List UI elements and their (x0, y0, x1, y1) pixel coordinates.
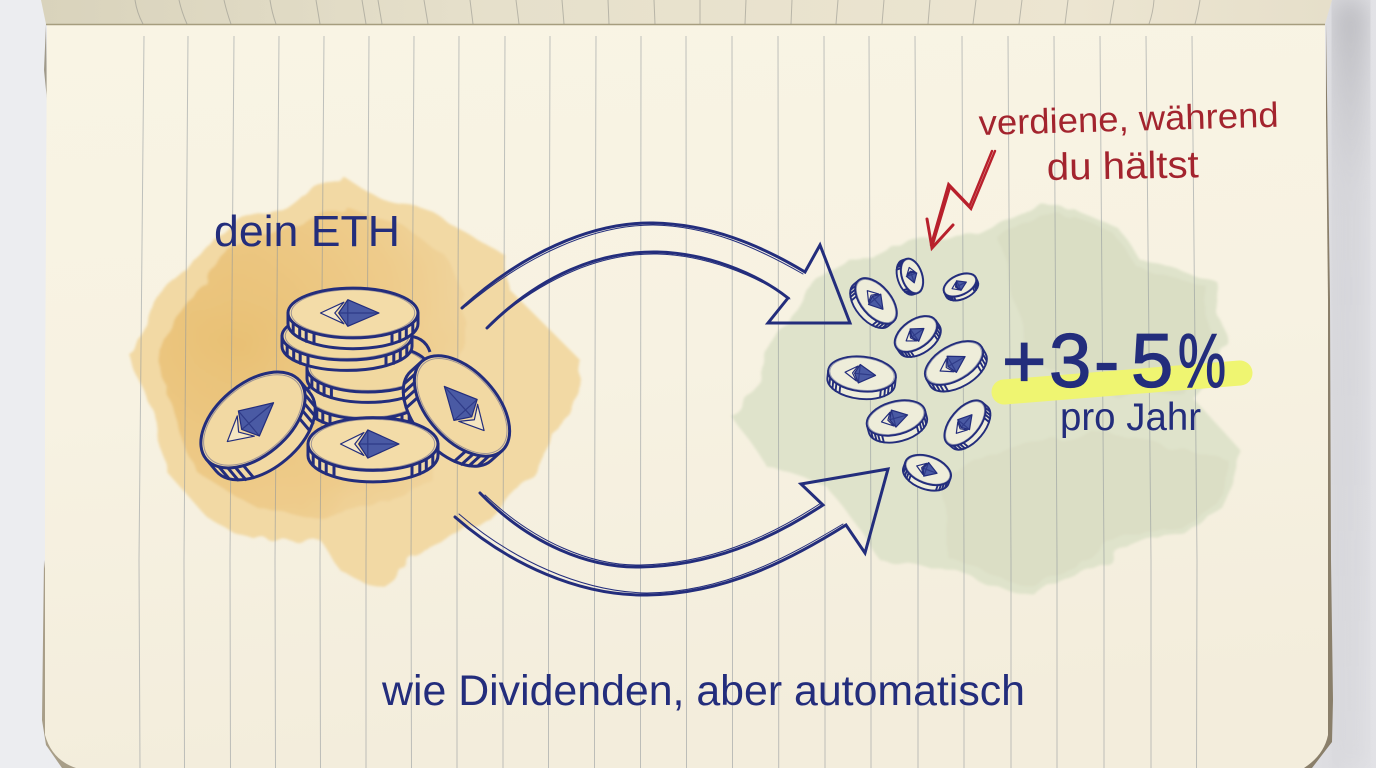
arrow: bottom curved arrow (455, 469, 888, 595)
icon: top coin (288, 288, 418, 349)
folded top page (41, 0, 1332, 24)
icon: coin 3 (940, 269, 982, 305)
red note: verdiene, während du hältst (978, 96, 1279, 189)
icon: coin 1 (842, 271, 905, 336)
coin stack: dein ETH (183, 288, 528, 499)
icon: coin 5 (918, 332, 994, 401)
icon: arc behind right coin (400, 336, 430, 352)
icon: coin 7 (863, 394, 931, 449)
watercolor wash: green (735, 205, 1240, 590)
big figure: +3-5%: % (1178, 319, 1226, 404)
red note: verdiene, während du hältst: du hältst (1046, 144, 1200, 189)
scattered reward coins (826, 256, 998, 496)
icon: front coin (308, 418, 438, 482)
icon: coin third in stack (307, 344, 429, 402)
arrow: red zigzag (927, 151, 995, 248)
big figure: +3-5%: +3-5 (1002, 319, 1173, 404)
icon: left tilted coin (183, 353, 333, 499)
icon: coin second in stack (282, 312, 412, 370)
icon: coin 9 (899, 449, 955, 496)
icon: right tilted coin (385, 338, 528, 484)
arrow: top curved arrow (462, 223, 850, 328)
highlighter stroke (1004, 373, 1240, 392)
watercolor wash: orange (125, 178, 580, 582)
icon: coin fourth in stack (306, 371, 426, 429)
ruled vertical lines (139, 36, 1197, 768)
label: dein ETH: dein ETH (214, 207, 400, 256)
icon: coin 4 (888, 309, 947, 364)
red note: verdiene, während du hältst: verdiene, während (978, 96, 1279, 143)
label: pro Jahr: pro Jahr (1060, 396, 1201, 439)
caption: wie Dividenden, aber automatisch: wie Dividenden, aber automatisch (381, 667, 1025, 715)
icon: coin 2 (893, 256, 927, 298)
icon: coin 8 (937, 393, 998, 457)
icon: coin 6 (826, 353, 898, 402)
